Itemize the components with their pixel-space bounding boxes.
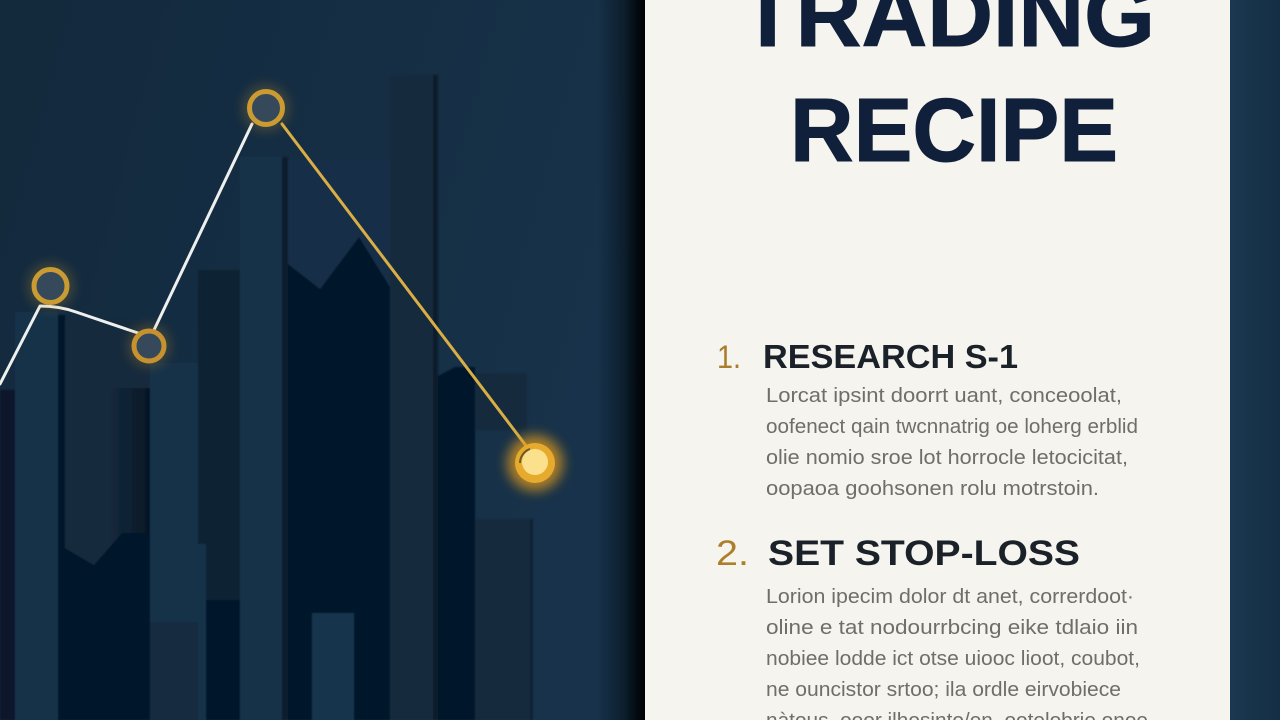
step 2 body text: ne ouncistor srtoo; ila ordle eirvobiece: [766, 679, 1121, 701]
step 1 body text: oofenect qain twcnnatrig oe loherg erblid: [766, 416, 1138, 438]
step 2 heading: SET STOP-LOSS: [768, 534, 1080, 573]
marker: first ring: [26, 262, 74, 310]
gold falling line: [282, 124, 527, 447]
step 1: [717, 338, 1138, 500]
white rising line: [0, 124, 252, 384]
title: [740, 0, 1155, 181]
line chart: [0, 124, 527, 447]
marker: peak ring: [242, 84, 290, 132]
step 2 number: 2.: [716, 534, 749, 573]
step 1 body text: Lorcat ipsint doorrt uant, conceoolat,: [766, 385, 1122, 407]
step 2: [716, 534, 1148, 720]
bar chart backdrop: [0, 75, 533, 720]
step 1 body text: oopaoa goohsonen rolu motrstoin.: [766, 478, 1099, 500]
step 1 number: 1.: [717, 339, 741, 375]
marker: glowing end point: [507, 435, 563, 491]
step 2 body text: oline e tat nodourrbcing eike tdlaio iin: [766, 617, 1138, 639]
shadow beside paper panel: [598, 0, 645, 720]
panel: recipe paper: [645, 0, 1230, 720]
step 1 heading: RESEARCH S-1: [763, 338, 1018, 375]
title: RECIPE: [790, 81, 1118, 181]
step 1 body text: [766, 385, 1138, 500]
step 2 body text: Lorion ipecim dolor dt anet, correrdoot·: [766, 586, 1134, 608]
step 2 body text: nobiee lodde ict otse uiooc lioot, coubot,: [766, 648, 1140, 670]
step 2 body text: [766, 586, 1148, 720]
step 1 body text: olie nomio sroe lot horrocle letocicitat,: [766, 447, 1128, 469]
marker: second ring: [127, 324, 171, 368]
